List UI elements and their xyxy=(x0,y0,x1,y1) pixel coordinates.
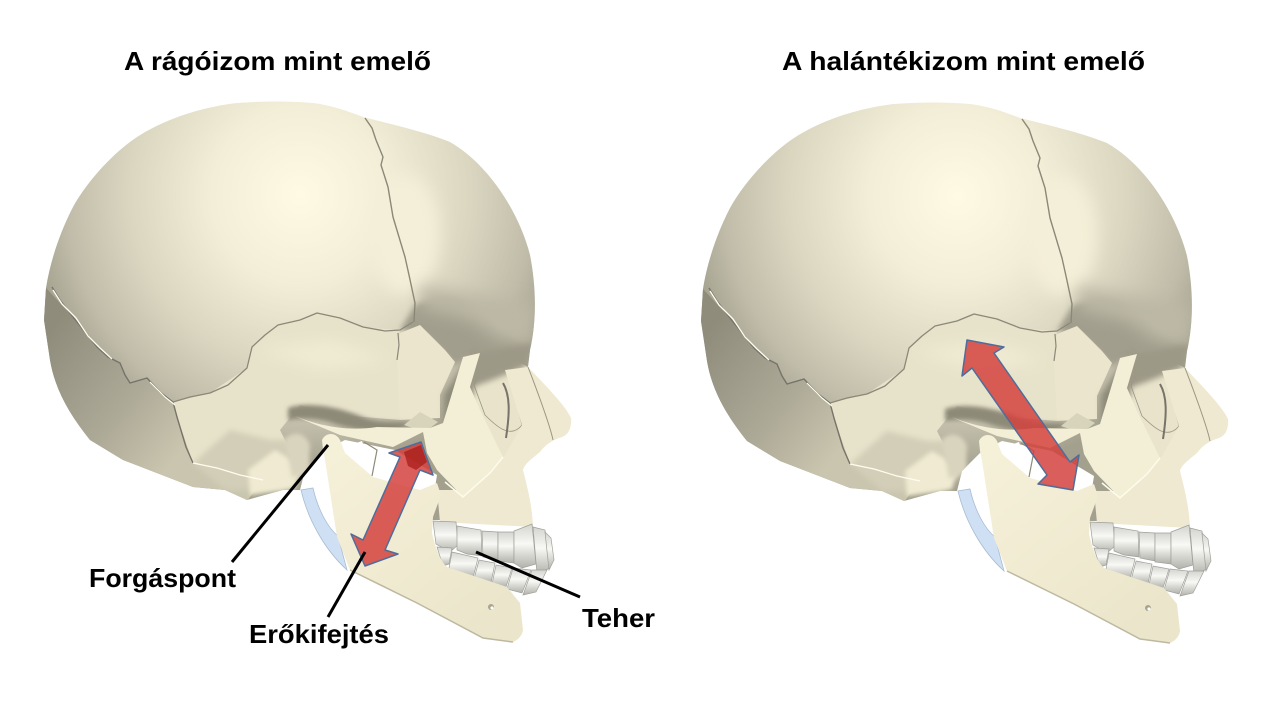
label: effort: Erőkifejtés xyxy=(249,619,389,649)
arrow: masseter double arrow xyxy=(351,442,433,566)
title: right: A halántékizom mint emelő xyxy=(782,46,1145,76)
leader line: pivot xyxy=(232,445,328,562)
arrow: temporalis double arrow xyxy=(962,340,1079,490)
title: left: A rágóizom mint emelő xyxy=(124,46,431,76)
leader line: effort xyxy=(328,552,365,617)
leader line: load xyxy=(476,552,580,597)
illustration: skull right xyxy=(687,102,1228,643)
illustration: skull left xyxy=(30,102,571,642)
label: load: Teher xyxy=(582,603,655,633)
label: pivot: Forgáspont xyxy=(89,563,236,593)
